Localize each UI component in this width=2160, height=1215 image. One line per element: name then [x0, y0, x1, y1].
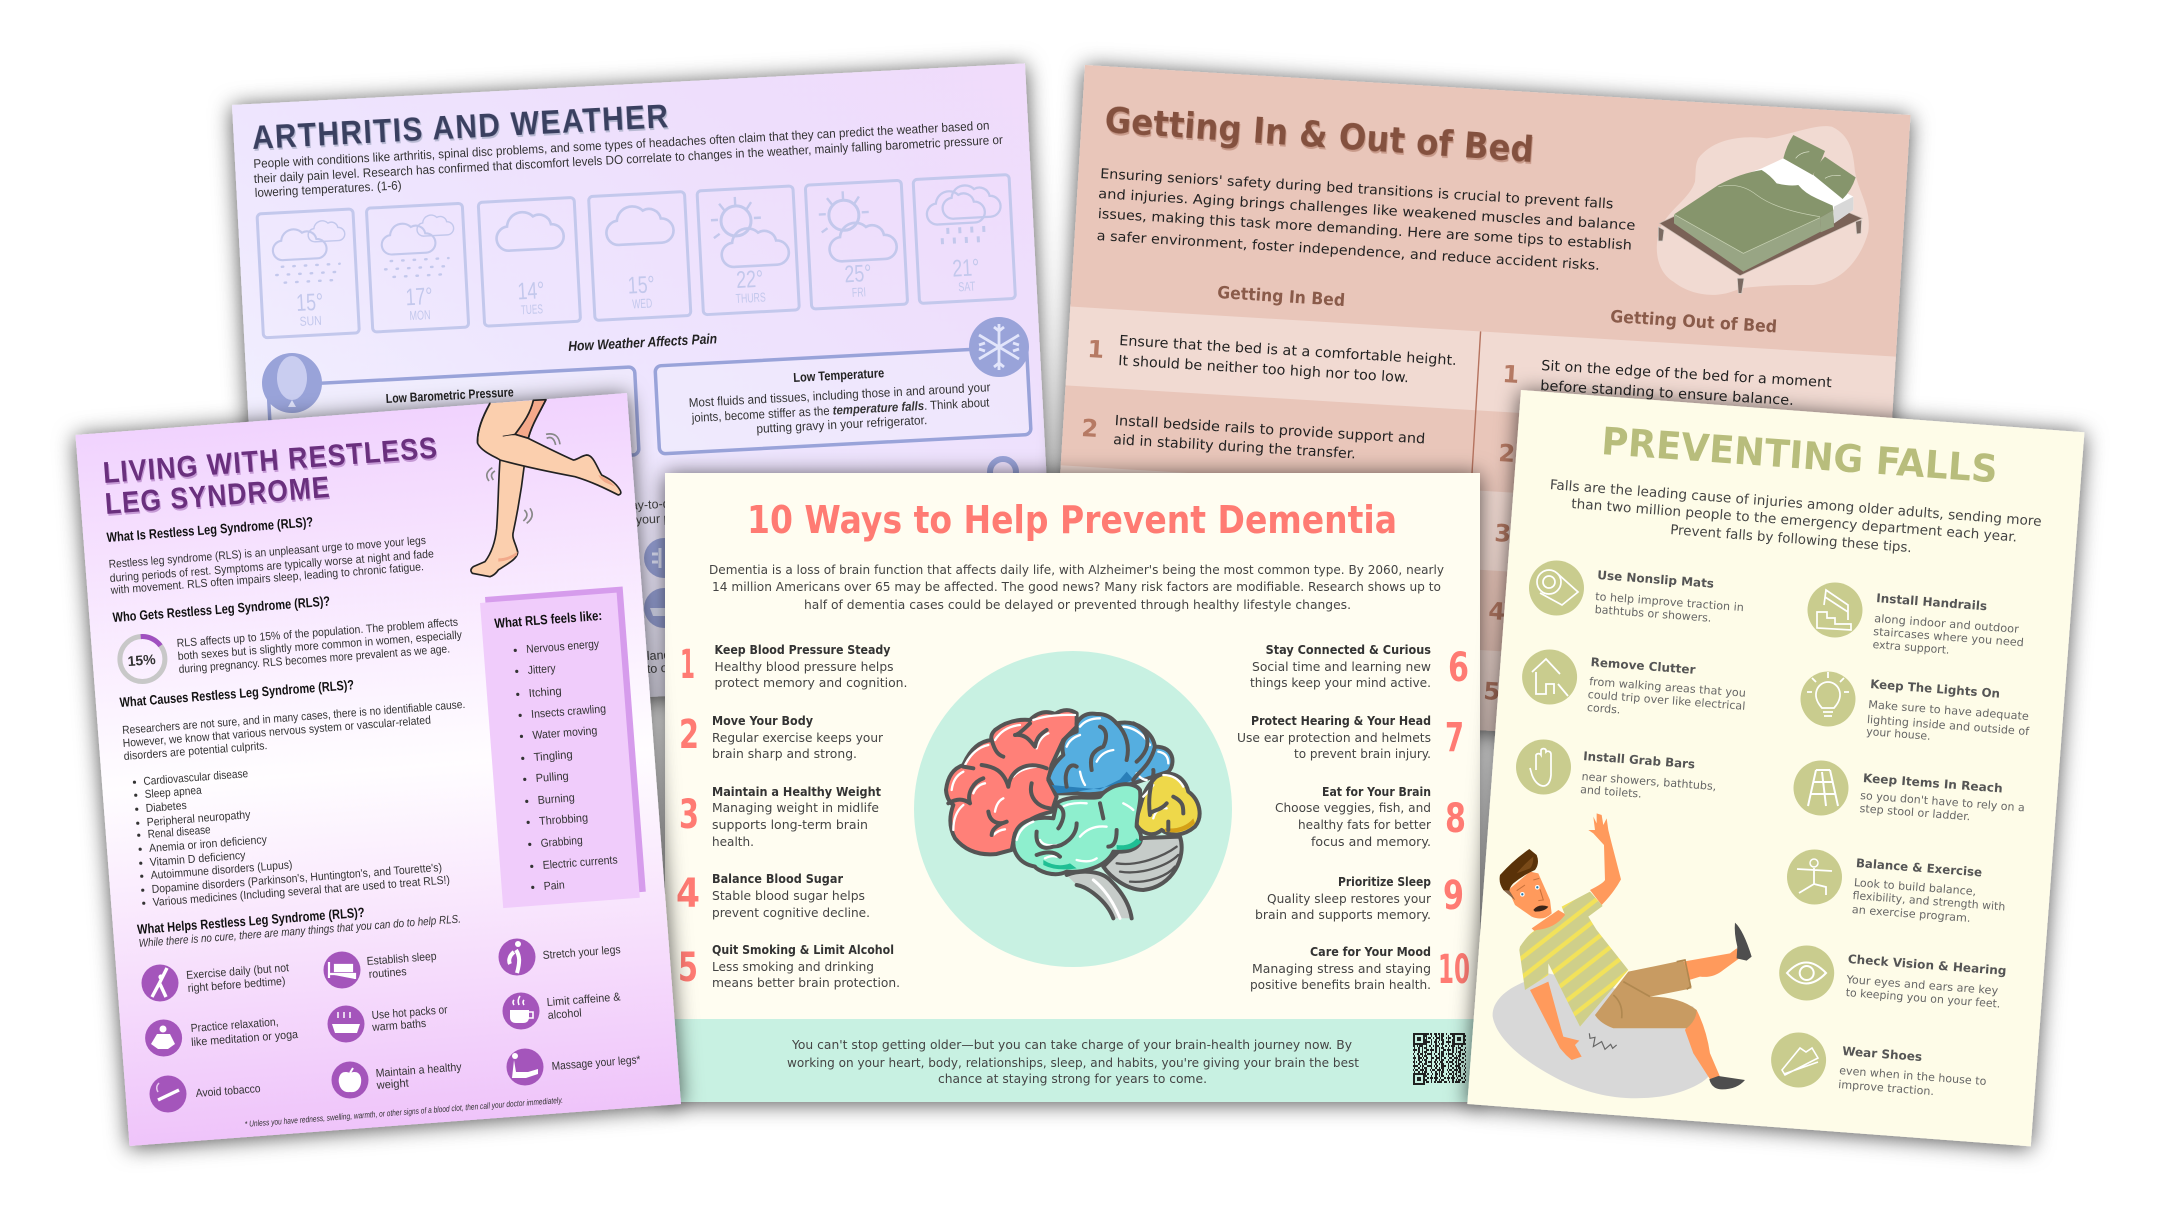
- tip: wear shoes: Wear Shoes: [1842, 1044, 1923, 1064]
- tip: balance and exercise: [1787, 850, 2006, 925]
- tip 5: means better brain protection.: [712, 975, 900, 990]
- tips with icons: Massage your legs*: [551, 1054, 641, 1073]
- tip: balance and exercise: Look to build balance,: [1853, 876, 1977, 898]
- tip 8: healthy fats for better: [1298, 817, 1432, 832]
- illustration: legs: [471, 400, 621, 577]
- tip: balance and exercise: an exercise program.: [1851, 903, 1971, 925]
- tip: wear shoes: even when in the house to: [1839, 1064, 1987, 1088]
- tip 8: 8: [1445, 796, 1466, 842]
- tip: vision and hearing: [1779, 946, 2007, 1011]
- tip: vision and hearing: Your eyes and ears are key: [1845, 973, 1999, 997]
- tips: left column: 1: [1087, 335, 1105, 364]
- tip 5: 5: [678, 945, 698, 991]
- intro text: and injuries. Aging brings challenges like weakened muscles and balance: [1098, 186, 1636, 234]
- icon: hot bath: [328, 1006, 364, 1042]
- box: low temperature: [655, 317, 1031, 454]
- footer band: chance at staying strong for years to come.: [938, 1072, 1207, 1086]
- tips with icons: [142, 938, 641, 1112]
- table rows: [1046, 307, 1896, 754]
- tip 8: [1275, 785, 1466, 849]
- list: causes: Dopamine disorders (Parkinson's, Huntington's, and Tourette's): [151, 862, 443, 896]
- tip 10: 10: [1438, 947, 1470, 993]
- tip 7: to prevent brain injury.: [1294, 746, 1431, 761]
- tip 8: focus and memory.: [1311, 834, 1431, 849]
- footer band: working on your heart, body, relationships, sleep, and habits, you're giving your brain the best: [787, 1056, 1359, 1070]
- tips: right column: 3: [1494, 519, 1512, 548]
- heading: preventing falls: PREVENTING FALLS: [1600, 419, 1999, 491]
- tips: right column: [1237, 643, 1470, 993]
- donut chart: 15%: [120, 636, 165, 682]
- tip 5: [678, 943, 900, 991]
- tips: right column: 5: [1483, 677, 1501, 706]
- box: low temperature: Most fluids and tissues, including those in and around your: [688, 380, 991, 410]
- tip: nonslip mats: Use Nonslip Mats: [1597, 568, 1714, 591]
- tip 2: Move Your Body: [712, 714, 813, 728]
- tip 7: Use ear protection and helmets: [1237, 730, 1431, 745]
- tip 2: [679, 712, 884, 761]
- tip 4: Stable blood sugar helps: [712, 888, 865, 903]
- tips with icons: Practice relaxation,: [190, 1016, 279, 1035]
- intro text: [253, 118, 1003, 200]
- tips: left column: aid in stability during the transfer.: [1113, 432, 1356, 462]
- tip 4: prevent cognitive decline.: [712, 905, 870, 920]
- tip 8: Choose veggies, fish, and: [1275, 800, 1431, 815]
- tip 2: 2: [679, 712, 699, 758]
- heading: living with restless leg syndrome: LEG SYNDROME: [104, 471, 332, 521]
- section: what is RLS: What Is Restless Leg Syndrome (RLS)?: [106, 514, 314, 545]
- weather forecast row: 15°: [296, 289, 324, 317]
- tip: grab bars: and toilets.: [1580, 783, 1642, 801]
- panel: getting in and out of bed: [1046, 65, 1910, 754]
- tips: left column: Install bedside rails to provide support and: [1114, 413, 1426, 447]
- intro text: [1549, 477, 2042, 556]
- sidebar: what RLS feels like: Burning: [537, 792, 575, 807]
- tips: left column: It should be neither too high nor too low.: [1118, 353, 1409, 386]
- partly hidden lower section: land: [646, 648, 671, 663]
- section: who gets RLS: Who Gets Restless Leg Syndrome (RLS)?: [112, 593, 331, 625]
- intro text: issues, making this task more demanding. Here are some tips to establish: [1097, 206, 1632, 254]
- tip 9: brain and supports memory.: [1255, 907, 1431, 922]
- tip 3: [679, 785, 881, 849]
- intro text: [1096, 166, 1636, 274]
- illustration: bed: [1657, 126, 1869, 295]
- tip 6: Stay Connected & Curious: [1266, 643, 1431, 657]
- tip 6: Social time and learning new: [1252, 659, 1431, 674]
- tip: items in reach: step stool or ladder.: [1859, 802, 1971, 823]
- tip 3: 3: [679, 792, 699, 838]
- list: causes: Autoimmune disorders (Lupus): [150, 859, 293, 882]
- icon: coffee: [502, 992, 540, 1030]
- tip 9: Prioritize Sleep: [1338, 875, 1431, 889]
- tip 3: Managing weight in midlife: [712, 800, 879, 815]
- partly hidden lower section: day-to-day tasks: [623, 494, 716, 513]
- footer band: You can't stop getting older—but you can take charge of your brain-health journey now. By: [791, 1038, 1352, 1052]
- intro text: Ensuring seniors' safety during bed transitions is crucial to prevent falls: [1100, 166, 1614, 212]
- box: low temperature: Low Temperature: [793, 365, 885, 385]
- sidebar: what RLS feels like: Throbbing: [539, 812, 588, 828]
- tip: grab bars: near showers, bathtubs,: [1581, 770, 1717, 793]
- list: causes: Peripheral neuropathy: [146, 809, 251, 829]
- tips with icons: Avoid tobacco: [195, 1083, 261, 1100]
- column heading: getting in bed: Getting In Bed: [1217, 283, 1346, 311]
- column heading: getting out of bed: Getting Out of Bed: [1610, 307, 1778, 337]
- tip 3: supports long-term brain: [712, 817, 868, 832]
- tip: grab bars: Install Grab Bars: [1583, 749, 1696, 771]
- tips: right column: 2: [1498, 439, 1516, 468]
- intro text: Falls are the leading cause of injuries among older adults, sending more: [1549, 477, 2042, 530]
- weather forecast row: 21°: [952, 254, 980, 283]
- tip 2: brain sharp and strong.: [712, 746, 857, 761]
- sidebar: what RLS feels like: Pain: [543, 879, 565, 893]
- tip 10: [1250, 945, 1470, 993]
- section: who gets RLS: during pregnancy. RLS becomes more prevalent as we age.: [178, 643, 450, 676]
- weather forecast row: THURS: [735, 289, 766, 306]
- section: who gets RLS: RLS affects up to 15% of the population. The problem affects: [176, 617, 459, 650]
- tip: handrails: [1808, 582, 2024, 657]
- list: causes: Cardiovascular disease: [143, 768, 249, 788]
- tip: handrails: staircases where you need: [1873, 625, 2024, 649]
- list: causes: Anemia or iron deficiency: [149, 834, 268, 855]
- section: what causes RLS: What Causes Restless Leg Syndrome (RLS)?: [119, 677, 355, 710]
- tips with icons: warm baths: [371, 1018, 427, 1034]
- list: causes: Sleep apnea: [144, 785, 203, 801]
- icon: massage: [506, 1048, 544, 1086]
- section heading: what helps RLS: What Helps Restless Leg Syndrome (RLS)?: [137, 905, 365, 937]
- weather forecast row: 15°: [627, 271, 655, 300]
- tip 7: [1237, 714, 1464, 761]
- tip 8: Eat for Your Brain: [1322, 785, 1431, 799]
- tip 6: 6: [1448, 645, 1469, 691]
- tips with icons: like meditation or yoga: [191, 1029, 299, 1049]
- tip: handrails: along indoor and outdoor: [1874, 612, 2020, 636]
- weather forecast row: [257, 175, 1015, 338]
- tip 4: 4: [676, 871, 700, 917]
- weather forecast row: 22°: [736, 266, 764, 294]
- tip: grab bars: [1516, 740, 1717, 801]
- tip: remove clutter: from walking areas that you: [1589, 675, 1746, 700]
- tip 9: Quality sleep restores your: [1267, 891, 1432, 906]
- tip: balance and exercise: flexibility, and strength with: [1852, 889, 2006, 913]
- section: what is RLS: [106, 514, 434, 597]
- tips: right column: [1483, 358, 1833, 706]
- section: who gets RLS: [112, 593, 463, 676]
- tip 9: 9: [1443, 873, 1464, 919]
- tip: balance and exercise: Balance & Exercise: [1855, 856, 1983, 879]
- tips with icons: routines: [368, 966, 407, 981]
- list: causes: Vitamin D deficiency: [149, 850, 246, 869]
- tip 1: 1: [680, 642, 695, 688]
- intro text: their daily pain level. Research has confirmed that discomfort levels DO correlate to changes in the weather, mainly falling barometric pressure or: [253, 133, 1003, 186]
- tip 10: positive benefits brain health.: [1250, 977, 1431, 992]
- tip 10: Care for Your Mood: [1310, 945, 1431, 959]
- weather forecast row: SUN: [299, 313, 322, 329]
- tips with icons: Exercise daily (but not: [186, 962, 290, 982]
- footer band: [665, 1019, 1480, 1102]
- weather forecast row: TUES: [520, 301, 543, 317]
- section: what causes RLS: Researchers are not sure, and in many cases, there is no identifiable cause.: [122, 699, 466, 737]
- tip: nonslip mats: [1529, 560, 1744, 625]
- sidebar: what RLS feels like: Itching: [528, 686, 562, 700]
- tip: lights: your house.: [1866, 725, 1931, 743]
- tip 7: 7: [1445, 715, 1464, 761]
- partly hidden lower section: [623, 459, 1016, 676]
- QR code: [1413, 1033, 1466, 1085]
- tip: items in reach: Keep Items In Reach: [1862, 771, 2003, 795]
- tips: right column: before standing to ensure balance.: [1540, 378, 1794, 409]
- tip 6: things keep your mind active.: [1250, 675, 1431, 690]
- weather forecast row: MON: [409, 307, 431, 323]
- sidebar: what RLS feels like: What RLS feels like:: [494, 608, 603, 631]
- section: what is RLS: with movement. RLS often impairs sleep, leading to chronic fatigue.: [109, 561, 424, 597]
- tips with icons: Use hot packs or: [371, 1004, 448, 1022]
- tip: handrails: Install Handrails: [1876, 591, 1988, 613]
- weather forecast row: SAT: [958, 279, 976, 294]
- footnote: * Unless you have redness, swelling, warmth, or other signs of a blood clot, then call your doctor immediately.: [244, 1095, 563, 1129]
- box: low barometric pressure: [262, 353, 639, 474]
- intro text: People with conditions like arthritis, spinal disc problems, and some types of headaches often claim that they can predict the weather based on: [253, 118, 990, 171]
- sidebar: what RLS feels like: Insects crawling: [531, 703, 606, 721]
- tip 1: Healthy blood pressure helps: [714, 659, 894, 674]
- tip 2: Regular exercise keeps your: [712, 730, 884, 745]
- tips: left column: [1081, 333, 1457, 462]
- tip: wear shoes: [1771, 1032, 1987, 1098]
- tip 10: Managing stress and staying: [1252, 961, 1431, 976]
- illustration: brain: [946, 710, 1200, 918]
- tips: right column: 4: [1488, 597, 1506, 626]
- illustration: falling man: [1493, 813, 1752, 1098]
- list: causes: Renal disease: [147, 824, 211, 841]
- icon: apple: [332, 1062, 368, 1098]
- tip 4: Balance Blood Sugar: [712, 872, 843, 886]
- tips: right column: 1: [1502, 360, 1520, 389]
- intro text: 14 million Americans over 65 may be affected. The good news? Many risk factors are modifiable. Research shows up to: [712, 580, 1441, 594]
- tip 9: [1255, 873, 1464, 922]
- intro text: half of dementia cases could be delayed or prevented through healthy lifestyle changes.: [804, 598, 1351, 612]
- tip 3: Maintain a Healthy Weight: [712, 785, 881, 799]
- tip 4: [676, 871, 870, 920]
- tip: vision and hearing: Check Vision & Hearing: [1847, 952, 2007, 978]
- weather forecast row: FRI: [852, 284, 866, 300]
- tips with icons: Limit caffeine &: [546, 991, 621, 1009]
- weather forecast row: 14°: [517, 277, 545, 305]
- box: low barometric pressure: Low Barometric Pressure: [385, 384, 514, 406]
- tip 5: Quit Smoking & Limit Alcohol: [712, 943, 894, 957]
- section: what causes RLS: [119, 677, 466, 763]
- tips: right column: Sit on the edge of the bed for a moment: [1541, 358, 1833, 391]
- icon: exercise: [142, 964, 178, 1002]
- partly hidden lower section: to other: [646, 660, 689, 676]
- weather forecast row: WED: [632, 295, 653, 311]
- sidebar: what RLS feels like: Electric currents: [542, 854, 618, 872]
- intro text: lowering temperatures. (1-6): [254, 178, 402, 200]
- box: low temperature: joints, become stiffer as the temperature falls. Think about: [691, 395, 990, 425]
- tip 1: protect memory and cognition.: [714, 675, 908, 690]
- sidebar: what RLS feels like: Jittery: [527, 663, 556, 677]
- tip: nonslip mats: bathtubs or showers.: [1594, 603, 1712, 625]
- tips with icons: Maintain a healthy: [375, 1061, 462, 1080]
- icon: meditation: [145, 1020, 182, 1056]
- tips with icons: weight: [375, 1078, 410, 1092]
- box: low temperature: putting gravy in your refrigerator.: [756, 413, 928, 436]
- tip: remove clutter: Remove Clutter: [1590, 655, 1696, 677]
- tips: left column: Ensure that the bed is at a comfortable height.: [1119, 333, 1457, 369]
- tip: lights: [1800, 672, 2031, 743]
- intro text: a safer environment, foster independence, and reduce accident risks.: [1096, 228, 1600, 274]
- tip: lights: lighting inside and outside of: [1866, 713, 2031, 738]
- list: causes: [132, 768, 451, 910]
- section: what is RLS: Restless leg syndrome (RLS) is an unpleasant urge to move your legs: [108, 535, 427, 571]
- tip: handrails: extra support.: [1872, 638, 1950, 657]
- section: what is RLS: during periods of rest. Symptoms are typically worse at night and fade: [109, 548, 434, 585]
- tip: items in reach: [1794, 760, 2025, 823]
- tip 5: Less smoking and drinking: [712, 959, 874, 974]
- panel: arthritis and weather: [232, 63, 1057, 717]
- subheading: how weather affects pain: How Weather Affects Pain: [568, 330, 717, 354]
- sidebar: what RLS feels like: Water moving: [532, 725, 598, 742]
- tip: vision and hearing: to keeping you on your feet.: [1845, 986, 2001, 1011]
- tips with icons: Establish sleep: [366, 951, 437, 968]
- tip 6: [1250, 643, 1469, 691]
- tips: left column: [676, 642, 908, 991]
- tip group with icons: [1516, 560, 2031, 1098]
- intro text: than two million people to the emergency department each year.: [1571, 496, 2018, 546]
- panel: preventing falls: [1467, 390, 2084, 1146]
- sidebar: what RLS feels like: Pulling: [535, 771, 569, 785]
- tip: remove clutter: cords.: [1586, 701, 1621, 717]
- section: what causes RLS: However, we know that various nervous system or vascular-related: [122, 715, 431, 750]
- heading: living with restless leg syndrome: LIVING WITH RESTLESS: [102, 432, 439, 490]
- tips with icons: alcohol: [547, 1007, 582, 1022]
- tip 1: [680, 642, 908, 690]
- icon: tobacco: [150, 1076, 186, 1112]
- intro text: [709, 563, 1444, 612]
- panel: 10 ways to help prevent dementia: [665, 473, 1480, 1102]
- tip: nonslip mats: to help improve traction in: [1595, 590, 1744, 614]
- section: what causes RLS: disorders are potential culprits.: [123, 740, 268, 763]
- icon: stretch: [498, 938, 536, 976]
- icon: sleep routine: [324, 952, 360, 988]
- tips with icons: right before bedtime): [187, 976, 286, 995]
- sidebar: what RLS feels like: Tingling: [533, 749, 573, 764]
- weather forecast row: 17°: [405, 283, 433, 311]
- partly hidden lower section: your pain level: [635, 509, 717, 527]
- section: who gets RLS: both sexes but is slightly more common in women, especially: [177, 629, 463, 663]
- sidebar: what RLS feels like: Grabbing: [540, 835, 583, 850]
- section heading: what helps RLS: While there is no cure, there are many things that you can do to help RLS.: [138, 914, 461, 950]
- tip: remove clutter: [1522, 650, 1746, 717]
- tip 3: health.: [712, 834, 754, 849]
- tip: wear shoes: improve traction.: [1838, 1078, 1934, 1098]
- tips with icons: Stretch your legs: [542, 944, 621, 962]
- sidebar: what RLS feels like: Nervous energy: [526, 638, 600, 656]
- tip 7: Protect Hearing & Your Head: [1251, 714, 1431, 728]
- donut chart: 15%: 15%: [127, 651, 157, 669]
- intro text: Prevent falls by following these tips.: [1670, 522, 1912, 556]
- tip: items in reach: so you don't have to rely on a: [1860, 789, 2025, 814]
- intro text: Dementia is a loss of brain function that affects daily life, with Alzheimer's being the most common type. By 2060, nearly: [709, 563, 1444, 577]
- list: causes: Diabetes: [145, 800, 187, 815]
- list: causes: Various medicines (Including several that are used to treat RLS!): [152, 874, 451, 909]
- circle behind brain: [914, 651, 1232, 967]
- heading: 10 ways to help prevent dementia: 10 Ways to Help Prevent Dementia: [747, 498, 1397, 542]
- tip: lights: Keep The Lights On: [1870, 677, 2000, 701]
- sidebar: what RLS feels like: [480, 587, 646, 908]
- tips: left column: 2: [1081, 414, 1099, 443]
- tip: lights: Make sure to have adequate: [1868, 698, 2030, 723]
- tip: remove clutter: could trip over like electrical: [1587, 688, 1746, 713]
- heading: getting in and out of bed: Getting In & Out of Bed: [1103, 100, 1535, 171]
- tip 1: Keep Blood Pressure Steady: [714, 643, 891, 657]
- weather forecast row: 25°: [844, 260, 872, 288]
- heading: arthritis and weather: ARTHRITIS AND WEATHER: [251, 97, 670, 156]
- panel: living with restless leg syndrome: [76, 393, 681, 1146]
- heading: living with restless leg syndrome: [102, 432, 439, 521]
